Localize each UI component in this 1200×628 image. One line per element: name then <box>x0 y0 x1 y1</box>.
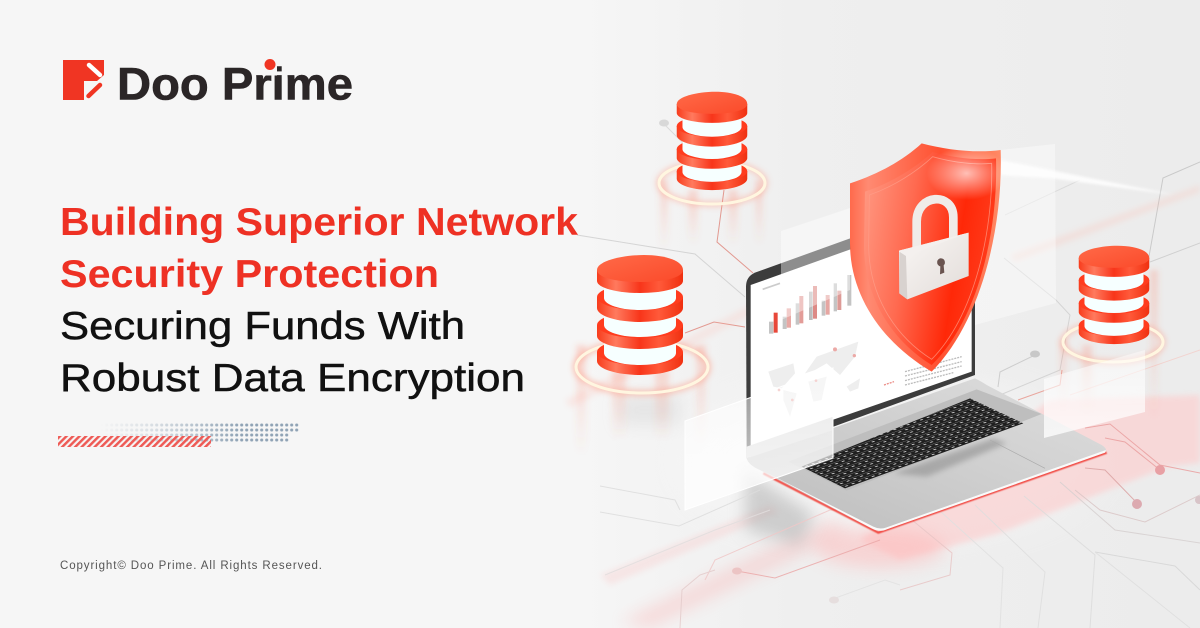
logo mark <box>63 60 104 100</box>
light streaks <box>565 160 1200 408</box>
ring <box>659 162 765 204</box>
logo: Doo Prime <box>63 58 353 110</box>
stack <box>677 92 747 190</box>
shield inner edge <box>869 157 992 359</box>
heading <box>60 201 578 400</box>
laptop red under-glow <box>763 453 1107 533</box>
laptop and shield scene <box>746 143 1107 533</box>
world map <box>768 342 860 417</box>
circuit nodes <box>659 120 1200 604</box>
data table <box>884 357 962 385</box>
laptop keyboard <box>802 398 1023 488</box>
logo red dot <box>264 59 276 70</box>
glass panel lower left <box>685 368 833 510</box>
logo tittle cover <box>262 60 277 76</box>
body <box>899 233 969 299</box>
shield front <box>864 152 996 365</box>
logo wordmark: Doo Prime <box>117 58 353 110</box>
decorative hatch and dots bar <box>58 422 300 447</box>
shackle <box>917 199 953 250</box>
laptop base <box>747 378 1106 531</box>
bar chart <box>769 275 851 334</box>
glass panel right <box>1044 350 1145 438</box>
stack <box>597 255 683 375</box>
padlock <box>899 199 969 299</box>
database right <box>1060 246 1163 420</box>
circuit traces <box>577 125 1200 628</box>
chart title <box>763 283 780 289</box>
glass panel top right <box>975 144 1056 325</box>
stack <box>1079 246 1149 344</box>
heading black line 2: Robust Data Encryption <box>60 357 525 400</box>
heading red line 1: Building Superior Network <box>60 201 578 244</box>
database top <box>659 92 765 250</box>
shield glare <box>927 147 1007 200</box>
laptop <box>746 193 1107 533</box>
heading black line 1: Securing Funds With <box>60 305 465 348</box>
shield <box>850 143 1007 372</box>
glow beams <box>576 345 706 455</box>
heading red line 2: Security Protection <box>60 253 439 296</box>
laptop screen <box>746 193 975 458</box>
keyhole <box>937 258 945 274</box>
ring <box>576 341 708 393</box>
shield side <box>850 143 1001 372</box>
copyright: Copyright© Doo Prime. All Rights Reserved. <box>60 560 322 572</box>
glow beams <box>660 180 763 250</box>
ring <box>1063 322 1163 362</box>
glow beams <box>1060 270 1158 420</box>
glass panel upper left of laptop <box>781 208 850 320</box>
database left <box>576 255 708 455</box>
